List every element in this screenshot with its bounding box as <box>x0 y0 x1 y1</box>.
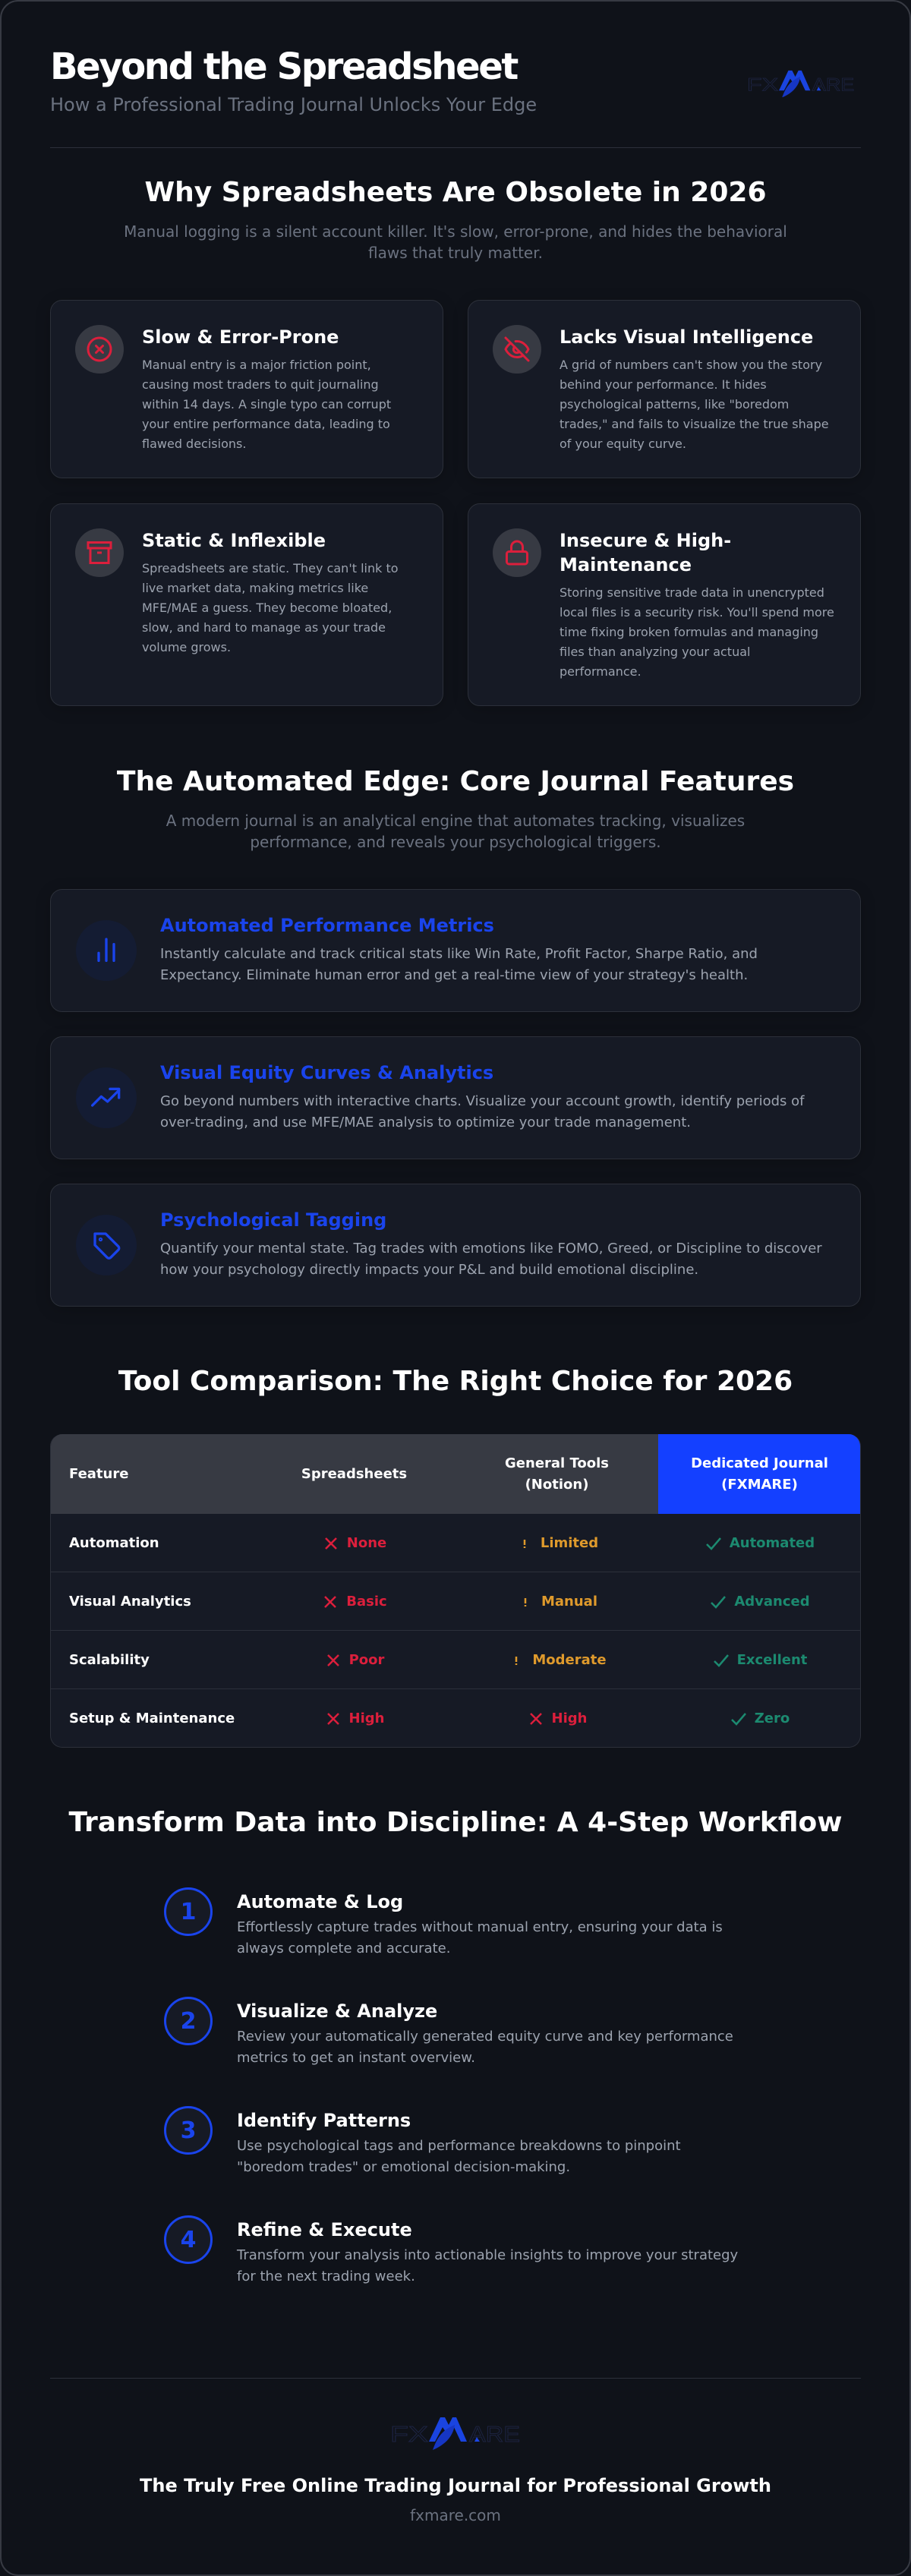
divider <box>50 2378 861 2379</box>
card text: of your equity curve. <box>560 437 686 451</box>
step number <box>164 1997 213 2045</box>
feature title: Automated Performance Metrics <box>160 915 494 936</box>
card text <box>560 585 834 679</box>
panel: psychological tagging <box>50 1184 861 1307</box>
row label: visual analytics: Visual Analytics <box>69 1593 191 1610</box>
cell: journal setup <box>731 1710 790 1726</box>
header: general tools: General Tools <box>505 1455 609 1471</box>
cell: spreadsheets setup: High <box>349 1710 384 1726</box>
step number: 1 <box>181 1898 196 1925</box>
header: general tools <box>505 1455 609 1493</box>
card title: Insecure & High- <box>560 530 731 551</box>
card title: Lacks Visual Intelligence <box>560 326 813 348</box>
feature text: over-trading, and use MFE/MAE analysis to optimize your trade management. <box>160 1115 691 1130</box>
feature text: Instantly calculate and track critical stats like Win Rate, Profit Factor, Sharpe Ratio, and <box>160 946 758 962</box>
card text: behind your performance. It hides <box>560 377 767 392</box>
header title: Beyond the Spreadsheet <box>50 46 517 88</box>
step 3 <box>164 2106 681 2175</box>
step title: Visualize & Analyze <box>237 2001 437 2022</box>
header logo: FX <box>747 74 778 95</box>
card text: Manual entry is a major friction point, <box>142 358 371 372</box>
step number <box>164 2106 213 2155</box>
row label: automation: Automation <box>69 1535 159 1550</box>
step text: Review your automatically generated equity curve and key performance <box>237 2029 733 2045</box>
card title: Maintenance <box>560 554 692 575</box>
card text: your entire performance data, leading to <box>142 417 390 431</box>
icon: tag <box>76 1215 137 1275</box>
comparison table <box>50 1434 861 1748</box>
card text: within 14 days. A single typo can corrupt <box>142 397 391 411</box>
feature text: Expectancy. Eliminate human error and get a real-time view of your strategy's health. <box>160 967 748 983</box>
feature text <box>160 1241 822 1278</box>
card text: live market data, making metrics like <box>142 581 368 595</box>
icon: trending up <box>76 1067 137 1128</box>
feature title: Psychological Tagging <box>160 1209 386 1231</box>
cell: spreadsheets analytics <box>324 1593 387 1610</box>
section intro: A modern journal is an analytical engine that automates tracking, visualizes <box>166 812 745 830</box>
header: dedicated journal <box>658 1434 861 1514</box>
panel: slow and error-prone <box>50 300 443 478</box>
divider <box>50 147 861 148</box>
section heading: tool comparison: Tool Comparison: The Right Choice for 2026 <box>118 1366 793 1397</box>
section intro: Manual logging is a silent account killer. It's slow, error-prone, and hides the behavioral <box>124 222 787 241</box>
cell: general tools setup <box>530 1710 587 1726</box>
step text: Effortlessly capture trades without manual entry, ensuring your data is <box>237 1919 723 1935</box>
step text: metrics to get an instant overview. <box>237 2050 475 2066</box>
panel: lacks visual intelligence <box>468 300 861 478</box>
card text: performance. <box>560 664 641 679</box>
footer url: fxmare.com <box>410 2506 501 2524</box>
card title: Slow & Error-Prone <box>142 326 339 348</box>
panel: automated performance metrics <box>50 889 861 1012</box>
card text: files than analyzing your actual <box>560 645 750 659</box>
cell: journal automation: Automated <box>730 1535 815 1550</box>
icon: lock <box>493 528 541 577</box>
step number <box>164 1887 213 1936</box>
section heading: workflow: Transform Data into Discipline: A 4-Step Workflow <box>68 1807 843 1838</box>
cell: spreadsheets scalability <box>327 1652 384 1667</box>
step text: Use psychological tags and performance breakdowns to pinpoint <box>237 2138 681 2154</box>
section intro <box>166 812 745 851</box>
icon: archive box <box>75 528 124 577</box>
step title: Automate & Log <box>237 1891 403 1912</box>
section intro: flaws that truly matter. <box>368 244 543 262</box>
card text: MFE/MAE a guess. They become bloated, <box>142 601 392 615</box>
step number: 4 <box>181 2226 196 2253</box>
section heading: why spreadsheets: Why Spreadsheets Are Obsolete in 2026 <box>144 177 767 208</box>
feature text: Quantify your mental state. Tag trades with emotions like FOMO, Greed, or Discipline to discover <box>160 1241 822 1256</box>
card text: psychological patterns, like "boredom <box>560 397 789 411</box>
icon: x circle <box>75 325 124 374</box>
table header row <box>50 1434 861 1514</box>
footer logo: ARE <box>469 2423 520 2447</box>
step text: for the next trading week. <box>237 2269 415 2284</box>
footer logo <box>390 2417 520 2450</box>
step text: "boredom trades" or emotional decision-making. <box>237 2159 570 2175</box>
row label: setup and maintenance: Setup & Maintenance <box>69 1710 235 1726</box>
header: feature: Feature <box>69 1465 128 1482</box>
step title: Refine & Execute <box>237 2219 412 2240</box>
cell: journal setup: Zero <box>755 1710 790 1726</box>
step text: always complete and accurate. <box>237 1941 450 1956</box>
card text <box>142 561 399 654</box>
step 2 <box>164 1997 733 2066</box>
step text <box>237 2029 733 2066</box>
card text: flawed decisions. <box>142 437 246 451</box>
step 4 <box>164 2215 738 2284</box>
card text: Spreadsheets are static. They can't link to <box>142 561 399 575</box>
feature text <box>160 946 758 983</box>
panel: visual equity curves <box>50 1036 861 1159</box>
step number: 3 <box>181 2117 196 2144</box>
card text: volume grows. <box>142 640 231 654</box>
header subtitle: How a Professional Trading Journal Unlocks Your Edge <box>50 94 537 115</box>
card text: Storing sensitive trade data in unencrypted <box>560 585 824 600</box>
icon: eye off <box>493 325 541 374</box>
feature text <box>160 1093 805 1130</box>
step text <box>237 2138 681 2175</box>
header: spreadsheets: Spreadsheets <box>301 1465 407 1482</box>
cell: general tools analytics: Manual <box>541 1593 597 1610</box>
panel: static and inflexible <box>50 503 443 706</box>
card title <box>560 530 731 575</box>
step text: Transform your analysis into actionable insights to improve your strategy <box>237 2247 738 2263</box>
cell: spreadsheets analytics: Basic <box>346 1593 387 1610</box>
section intro <box>124 222 787 262</box>
cell: spreadsheets automation: None <box>347 1535 386 1550</box>
section intro: performance, and reveals your psychological triggers. <box>250 833 661 851</box>
cell: spreadsheets scalability: Poor <box>349 1652 384 1667</box>
card title: Static & Inflexible <box>142 530 326 551</box>
card text: local files is a security risk. You'll spend more <box>560 605 834 620</box>
card text <box>560 358 829 451</box>
cell: general tools setup: High <box>552 1710 587 1726</box>
cell: journal analytics: Advanced <box>734 1593 810 1610</box>
row label: scalability: Scalability <box>69 1652 150 1667</box>
step text <box>237 1919 723 1956</box>
cell: general tools automation: Limited <box>541 1535 598 1550</box>
step text <box>237 2247 738 2284</box>
header logo <box>747 70 854 97</box>
section heading: core features: The Automated Edge: Core Journal Features <box>117 766 794 797</box>
card text <box>142 358 391 451</box>
step title: Identify Patterns <box>237 2110 411 2131</box>
step number: 2 <box>181 2007 196 2035</box>
cell: spreadsheets setup <box>327 1710 384 1726</box>
cell: journal scalability: Excellent <box>737 1652 807 1667</box>
card text: causing most traders to quit journaling <box>142 377 379 392</box>
card text: trades," and fails to visualize the true shape <box>560 417 829 431</box>
header logo: ARE <box>812 74 854 95</box>
feature title: Visual Equity Curves & Analytics <box>160 1062 493 1083</box>
header: dedicated journal: Dedicated Journal <box>691 1455 828 1471</box>
step 1 <box>164 1887 723 1956</box>
footer tagline: The Truly Free Online Trading Journal for Professional Growth <box>140 2475 771 2496</box>
header: general tools: (Notion) <box>525 1476 588 1493</box>
card text: A grid of numbers can't show you the story <box>560 358 822 372</box>
header: dedicated journal: (FXMARE) <box>721 1476 798 1493</box>
icon: bar chart <box>76 920 137 981</box>
panel: insecure and high-maintenance <box>468 503 861 706</box>
footer logo: FX <box>390 2423 428 2447</box>
feature text: how your psychology directly impacts your P&L and build emotional discipline. <box>160 1262 698 1278</box>
cell: general tools scalability: Moderate <box>532 1652 607 1667</box>
card text: slow, and hard to manage as your trade <box>142 620 386 635</box>
feature text: Go beyond numbers with interactive charts. Visualize your account growth, identify periods of <box>160 1093 805 1109</box>
cell: spreadsheets automation <box>325 1535 386 1550</box>
card text: time fixing broken formulas and managing <box>560 625 818 639</box>
step number <box>164 2215 213 2264</box>
